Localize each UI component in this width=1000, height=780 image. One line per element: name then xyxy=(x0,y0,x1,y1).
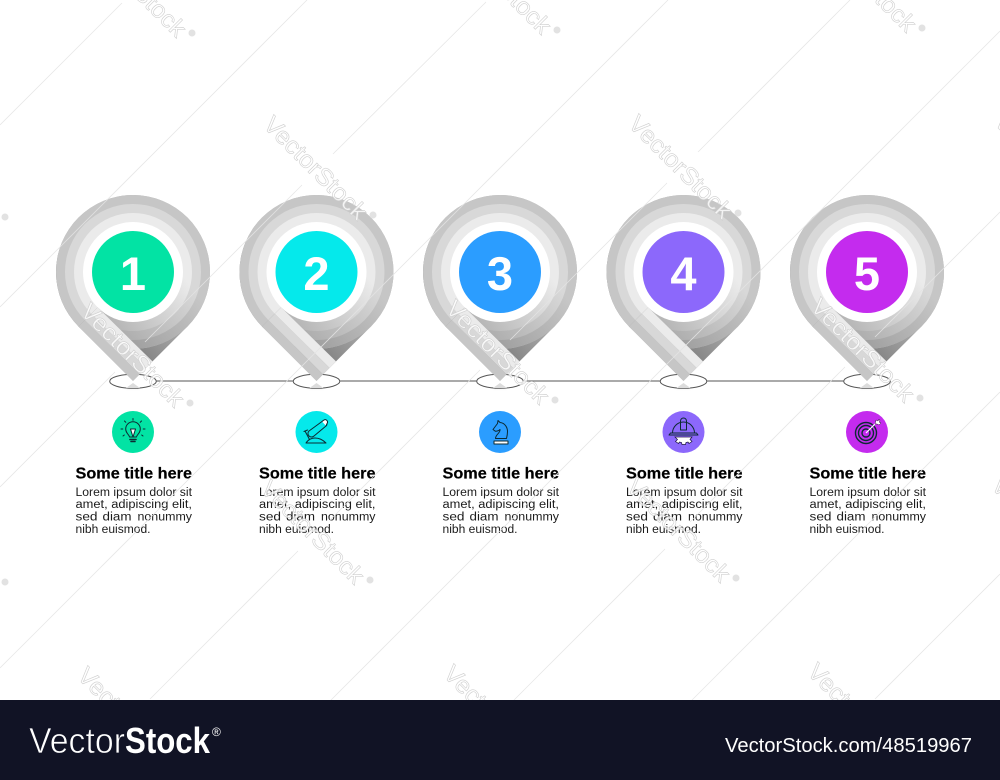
description 3: amet, adipiscing elit, xyxy=(442,499,559,511)
title 1: Some title here xyxy=(76,466,192,483)
description 1: amet, adipiscing elit, xyxy=(76,499,192,511)
footer url: VectorStock.com/48519967 xyxy=(725,735,972,757)
description 4: nonummy xyxy=(688,512,743,524)
description 4: sed xyxy=(626,512,648,524)
watermark text: VectorStock xyxy=(72,662,187,777)
footer logo xyxy=(29,720,221,761)
description 4: Lorem ipsum dolor sit xyxy=(626,487,743,499)
watermark text: VectorStock xyxy=(440,295,555,410)
watermark text: VectorStock xyxy=(802,658,917,773)
title 2: Some title here xyxy=(259,466,376,483)
ground ellipse 3 xyxy=(477,374,523,392)
description 2: Lorem ipsum dolor sit xyxy=(259,487,376,499)
title 4: Some title here xyxy=(626,466,743,483)
number badge 2: 2 xyxy=(303,247,330,300)
ground ellipse 1 xyxy=(110,374,156,392)
number badge 5: 5 xyxy=(854,247,880,300)
description 2: nonummy xyxy=(321,512,376,524)
description 3: Lorem ipsum dolor sit xyxy=(442,487,560,499)
description 2: sed xyxy=(259,512,281,524)
watermark text: VectorStock xyxy=(438,660,553,775)
description 4: amet, adipiscing elit, xyxy=(626,499,742,511)
title 5: Some title here xyxy=(810,466,926,483)
step 5 xyxy=(790,195,944,536)
watermark text: VectorStock xyxy=(805,293,920,408)
description 5: diam xyxy=(836,512,866,524)
number badge 3 xyxy=(459,231,541,313)
description 1 xyxy=(76,487,193,536)
description 3: diam xyxy=(470,512,498,524)
footer logo: Stock xyxy=(125,720,211,761)
step 1 xyxy=(56,195,210,536)
description 1: nibh euismod. xyxy=(76,524,150,536)
number badge 5 xyxy=(826,231,908,313)
description 3 xyxy=(442,487,560,536)
watermark text: VectorStock xyxy=(623,110,738,225)
number badge 1: 1 xyxy=(120,247,146,300)
ground ellipse 4 xyxy=(660,374,707,392)
description 5: nonummy xyxy=(872,512,926,524)
description 5: sed xyxy=(810,512,832,524)
description 1: sed xyxy=(76,512,98,524)
description 3: nonummy xyxy=(504,512,559,524)
icon: microscope xyxy=(296,411,338,453)
footer logo: ® xyxy=(212,725,221,739)
description 2: amet, adipiscing elit, xyxy=(259,499,376,511)
watermark text: VectorStock xyxy=(255,475,370,590)
icon: light bulb xyxy=(112,411,154,453)
description 2: diam xyxy=(286,512,315,524)
watermark text: VectorStock xyxy=(621,473,736,588)
title 3: Some title here xyxy=(442,466,559,483)
watermark text: VectorStock xyxy=(75,298,190,413)
description 3: nibh euismod. xyxy=(442,524,518,536)
watermark text: VectorStock xyxy=(258,111,373,226)
description 3: sed xyxy=(442,512,464,524)
number badge 1 xyxy=(92,231,174,313)
step 3 xyxy=(423,195,577,536)
pin marker 3 xyxy=(423,195,577,381)
icon: target with arrow xyxy=(846,411,888,453)
description 5: Lorem ipsum dolor sit xyxy=(810,487,927,499)
pin marker 2 xyxy=(240,195,394,381)
number badge 2 xyxy=(276,231,358,313)
ground ellipse 2 xyxy=(293,374,340,392)
ground ellipse 5 xyxy=(844,374,890,392)
number badge 4: 4 xyxy=(670,247,697,300)
footer bar xyxy=(0,700,1000,780)
description 2: nibh euismod. xyxy=(259,524,334,536)
description 5 xyxy=(810,487,927,536)
description 5: amet, adipiscing elit, xyxy=(810,499,926,511)
icon: helmet and gear xyxy=(662,411,704,453)
description 1: diam xyxy=(102,512,132,524)
description 1: Lorem ipsum dolor sit xyxy=(76,487,193,499)
step 2 xyxy=(240,195,394,536)
icon: chess knight xyxy=(479,411,521,453)
description 5: nibh euismod. xyxy=(810,524,884,536)
step 4 xyxy=(606,195,760,536)
description 4 xyxy=(626,487,743,536)
timeline connector line xyxy=(133,380,867,382)
pin marker 5 xyxy=(790,195,944,381)
pin marker 1 xyxy=(56,195,210,381)
description 4: nibh euismod. xyxy=(626,524,701,536)
number badge 4 xyxy=(642,231,724,313)
number badge 3: 3 xyxy=(487,247,513,300)
description 1: nonummy xyxy=(138,512,192,524)
description 4: diam xyxy=(653,512,682,524)
footer logo: Vector xyxy=(29,720,125,761)
description 2 xyxy=(259,487,376,536)
pin marker 4 xyxy=(606,195,760,381)
